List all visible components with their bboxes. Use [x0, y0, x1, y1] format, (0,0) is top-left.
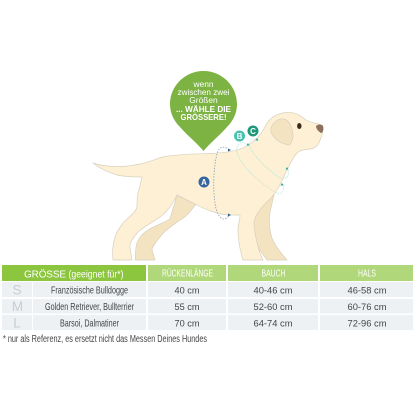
- row S: 46-58 cm: [348, 285, 387, 296]
- row M: 52-60 cm: [254, 302, 293, 313]
- badge B: B: [237, 132, 243, 141]
- row L: L: [13, 316, 21, 330]
- callout: green pin: ... WÄHLE DIE: [176, 104, 231, 114]
- badge C: C: [250, 127, 256, 136]
- badge A: A: [201, 178, 207, 187]
- table header: HALS: [358, 268, 376, 280]
- row L: Barsoi, Dalmatiner: [60, 317, 119, 329]
- far hind leg: [135, 195, 196, 260]
- row S: 40 cm: [174, 285, 200, 296]
- row L: 72-96 cm: [348, 318, 387, 330]
- row M: 60-76 cm: [348, 302, 387, 313]
- row M: M: [12, 299, 23, 314]
- row L: [2, 315, 413, 330]
- measure line C: [250, 139, 288, 178]
- callout: green pin: [170, 71, 237, 151]
- table header: (geeignet für*): [68, 270, 124, 280]
- far front leg: [253, 195, 287, 260]
- callout: green pin: zwischen zwei: [178, 87, 230, 97]
- badge C: [248, 126, 258, 136]
- badge B: [234, 130, 245, 142]
- row L: 70 cm: [174, 318, 200, 330]
- size table: [2, 265, 413, 330]
- row M: [2, 299, 413, 314]
- table header: RÜCKENLÄNGE: [162, 268, 213, 280]
- row S: 40-46 cm: [254, 285, 293, 296]
- footnote: * nur als Referenz, es ersetzt nicht das Messen Deines Hundes: [3, 334, 207, 345]
- eye: [297, 123, 301, 129]
- row S: [2, 282, 413, 298]
- arrows on lines B and C: [246, 138, 288, 186]
- table header: [2, 265, 413, 281]
- measure line A: [214, 147, 229, 219]
- measure line B: [237, 143, 284, 193]
- row S: Französische Bulldogge: [51, 284, 128, 296]
- ear: [271, 119, 293, 145]
- row M: 55 cm: [174, 302, 200, 313]
- table header: BAUCH: [262, 268, 286, 280]
- arrows on line A: [228, 148, 231, 216]
- badge A: [198, 176, 210, 188]
- row L: 64-74 cm: [254, 318, 293, 330]
- table header: GRÖSSE: [24, 268, 66, 280]
- callout: green pin: Größen: [189, 95, 218, 105]
- callout: green pin: wenn: [192, 79, 214, 89]
- callout: green pin: GRÖSSERE!: [180, 112, 226, 122]
- dog illustration: [93, 112, 323, 260]
- row M: Golden Retriever, Bullterrier: [45, 301, 134, 313]
- dog body: [93, 112, 323, 260]
- row S: S: [12, 282, 22, 298]
- nose: [316, 124, 323, 133]
